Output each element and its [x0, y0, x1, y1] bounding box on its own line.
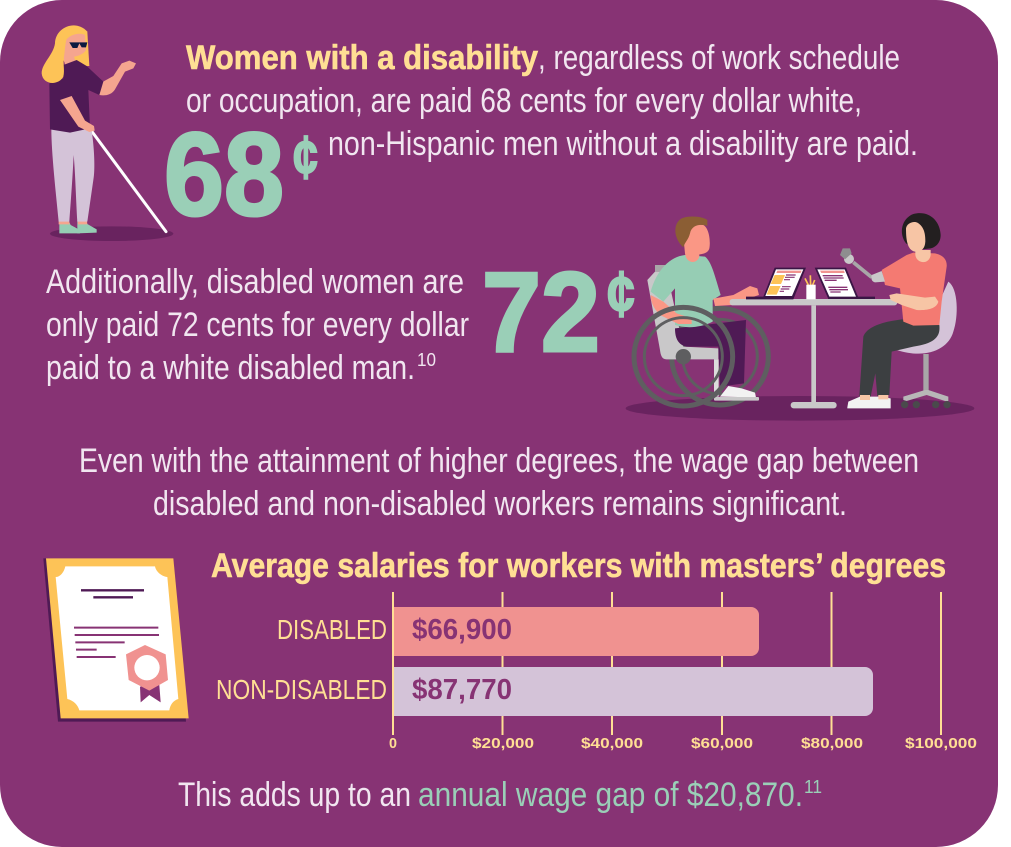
icon: diploma certificate: [43, 558, 189, 722]
text block: women with a disability 68 cents: , regardless of work schedule: [538, 39, 900, 77]
axis labels: [389, 736, 977, 752]
table: [730, 299, 897, 305]
back wheel: [672, 308, 768, 405]
big number: 68 cents: 68: [164, 109, 284, 241]
text block: women with a disability 68 cents: [186, 39, 918, 163]
text block: women with a disability 68 cents: or occupation, are paid 68 cents for every dollar white,: [186, 82, 862, 120]
chair: [897, 282, 957, 354]
axis labels: $60,000: [691, 736, 753, 752]
axis labels: 0: [389, 736, 397, 752]
bar: disabled: [394, 607, 759, 656]
text block: higher degrees: [79, 442, 919, 523]
category label: disabled: DISABLED: [277, 614, 387, 645]
axis labels: $40,000: [581, 736, 643, 752]
bar: non-disabled: $87,770: [412, 674, 512, 706]
axis labels: $100,000: [905, 736, 977, 752]
axis labels: $20,000: [472, 736, 534, 752]
axis labels: $80,000: [801, 736, 863, 752]
pencils and cup: [805, 275, 815, 285]
text block: additionally: 10: [417, 350, 436, 370]
big number: 72 cents: 72: [482, 249, 600, 375]
text block: additionally: paid to a white disabled man.: [46, 349, 415, 387]
laptop right: [815, 268, 875, 299]
icon: woman with white cane: [42, 25, 173, 241]
bar chart: average salaries: [216, 592, 977, 752]
text block: annual wage gap: annual wage gap of $20,870.: [418, 776, 803, 814]
prosthetic arm: [853, 262, 872, 277]
text block: annual wage gap: [178, 776, 822, 814]
icon: wheelchair user and woman with prosthetic arm at table: [626, 213, 974, 421]
category label: non-disabled: NON-DISABLED: [216, 674, 387, 705]
text block: higher degrees: disabled and non-disabled workers remains significant.: [153, 485, 847, 523]
text block: additionally: only paid 72 cents for every dollar: [46, 306, 469, 344]
bar: disabled: $66,900: [412, 614, 512, 646]
big number: 68 cents: ¢: [293, 123, 318, 191]
woman: [859, 319, 940, 397]
text block: annual wage gap: 11: [804, 777, 822, 797]
laptop left: [746, 268, 806, 299]
text block: women with a disability 68 cents: Women with a disability: [186, 39, 538, 77]
text block: women with a disability 68 cents: non-Hispanic men without a disability are paid.: [328, 125, 918, 163]
text block: additionally: [46, 263, 469, 387]
front wheel: [634, 307, 733, 406]
text block: annual wage gap: This adds up to an: [178, 776, 411, 814]
big number: 72 cents: ¢: [607, 257, 635, 330]
text block: additionally: Additionally, disabled women are: [46, 263, 464, 301]
bar: non-disabled: [394, 667, 873, 716]
